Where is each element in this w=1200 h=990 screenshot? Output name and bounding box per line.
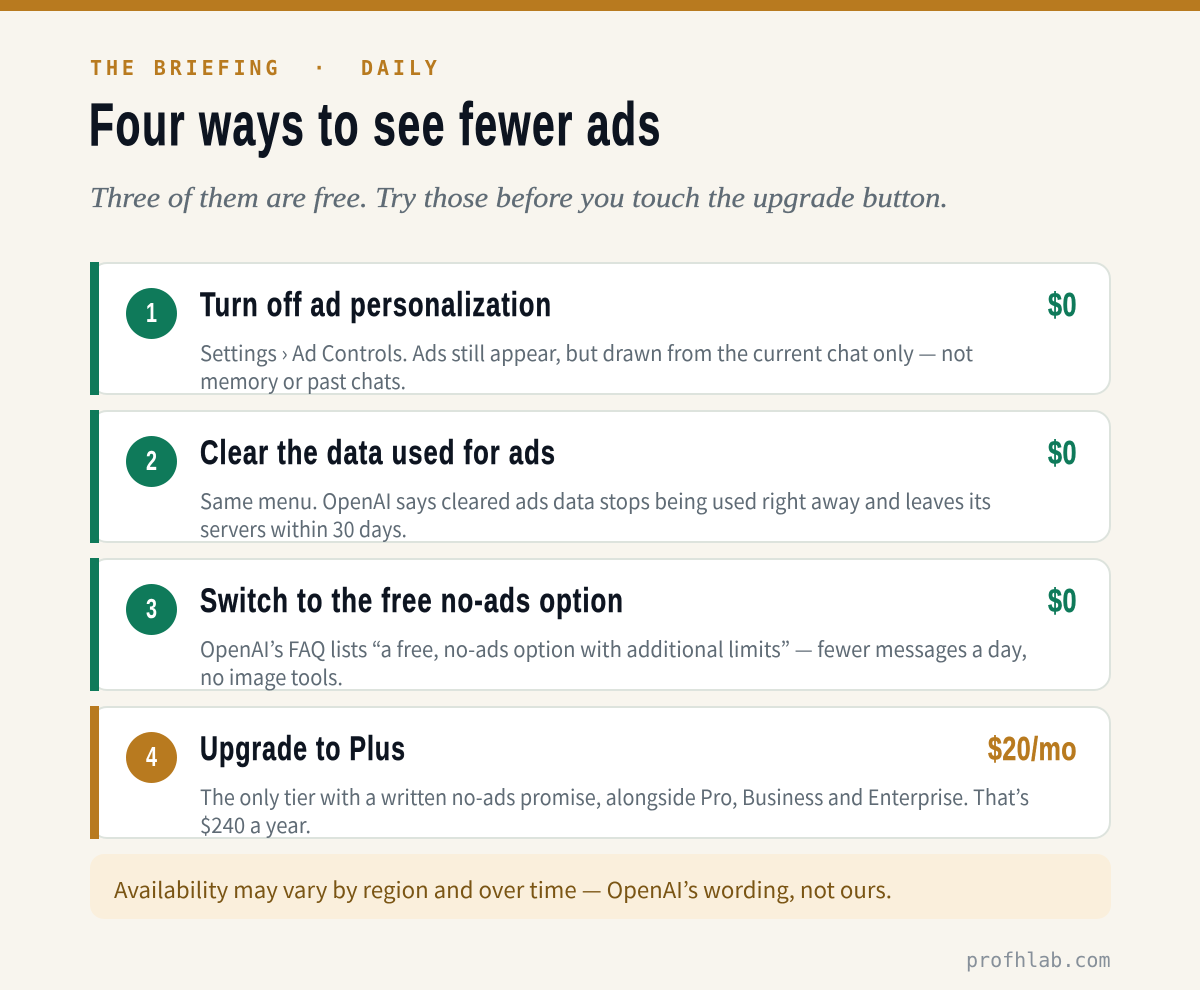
- number badge 2: [126, 436, 177, 487]
- panel: option 1: [90, 262, 1110, 396]
- description 1: [200, 338, 973, 396]
- title: Four ways to see fewer ads: [89, 91, 662, 158]
- description 4: $240 a year.: [200, 810, 311, 840]
- top accent bar: [0, 0, 1200, 11]
- number badge 3: [126, 584, 177, 635]
- number badge 4: [126, 732, 177, 783]
- subtitle: Three of them are free. Try those before you touch the upgrade button.: [90, 182, 948, 214]
- description 3: no image tools.: [200, 662, 343, 692]
- number badge 2: 2: [146, 445, 157, 476]
- footer credit: profhlab.com: [966, 948, 1110, 972]
- heading 4: Upgrade to Plus: [200, 730, 406, 768]
- panel: option 2: [90, 410, 1110, 544]
- number badge 1: [126, 288, 177, 339]
- price 2: $0: [1048, 434, 1077, 471]
- price 3: $0: [1048, 582, 1077, 619]
- price 1: $0: [1048, 286, 1077, 323]
- number badge 3: 3: [146, 593, 157, 624]
- panel: option 4: [90, 706, 1110, 840]
- description 4: [200, 782, 1029, 840]
- description 2: Same menu. OpenAI says cleared ads data stops being used right away and leaves its: [200, 486, 991, 516]
- description 4: The only tier with a written no-ads promise, alongside Pro, Business and Enterprise. That’s: [200, 782, 1029, 812]
- description 3: [200, 634, 1027, 692]
- description 1: Settings › Ad Controls. Ads still appear, but drawn from the current chat only — not: [200, 338, 973, 368]
- description 2: servers within 30 days.: [200, 514, 407, 544]
- number badge 4: 4: [146, 741, 157, 772]
- eyebrow: THE BRIEFING · DAILY: [90, 56, 441, 80]
- heading 1: Turn off ad personalization: [200, 286, 552, 324]
- panel: option 3: [90, 558, 1110, 692]
- description 2: [200, 486, 991, 544]
- number badge 1: 1: [146, 297, 157, 328]
- description 3: OpenAI’s FAQ lists “a free, no-ads option with additional limits” — fewer messages a day,: [200, 634, 1027, 664]
- heading 2: Clear the data used for ads: [200, 434, 556, 472]
- price 4: $20/mo: [988, 730, 1077, 767]
- description 1: memory or past chats.: [200, 366, 406, 396]
- callout: availability note: [90, 854, 1111, 919]
- callout: availability note: Availability may vary by region and over time — OpenAI’s wording, not ours.: [114, 873, 892, 905]
- heading 3: Switch to the free no-ads option: [200, 582, 624, 620]
